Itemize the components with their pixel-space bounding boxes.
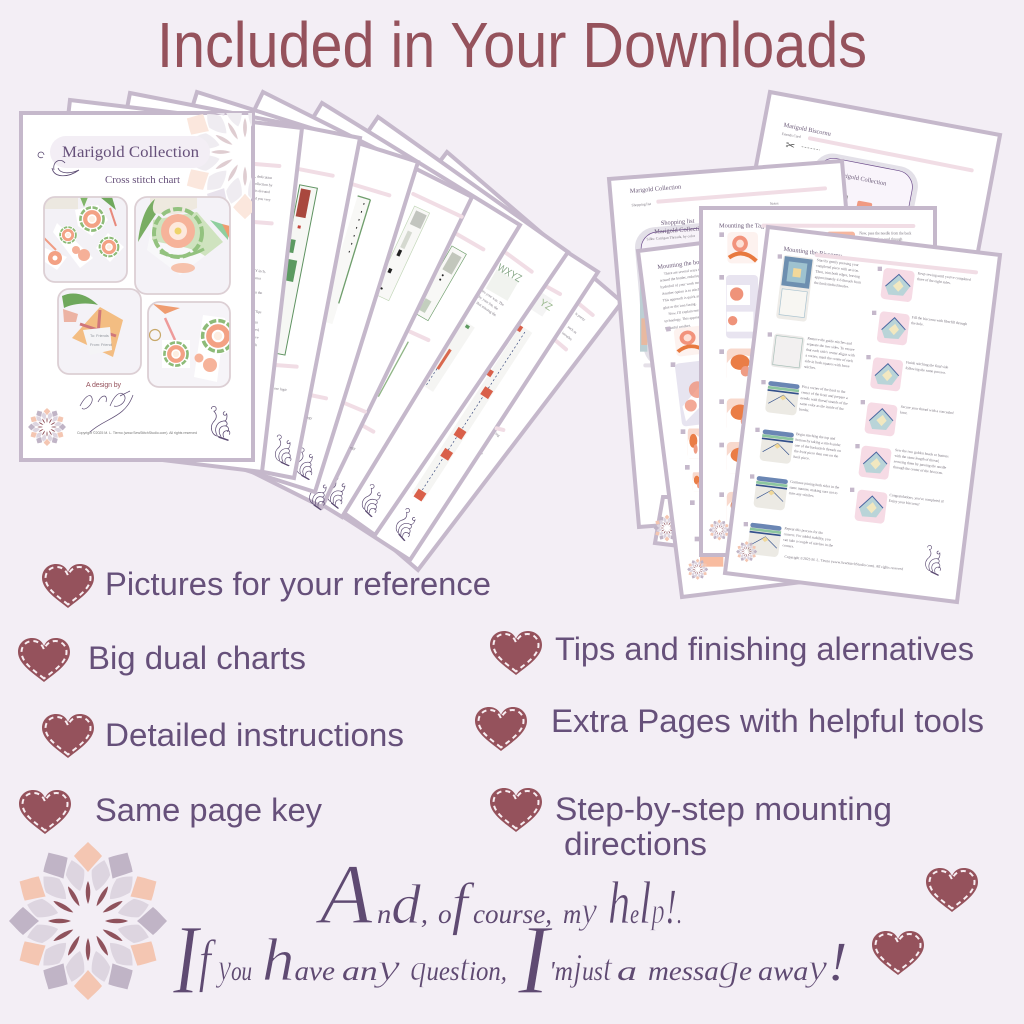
feature: mounting directions: directions (564, 826, 707, 862)
copyright: Copyright ©2025 M. L. Tierno (www.SewStitchStudio.com). All rights reserved (784, 554, 904, 571)
shopping list page: Marigold Collection (630, 183, 682, 195)
cover page (19, 111, 255, 462)
mounting the tag page: Mounting the Tag (719, 223, 765, 230)
shopping list page: Silks: Carrigan Threads, by color (646, 234, 696, 242)
line one: nd, (377, 874, 428, 936)
finishing card page: Marigold Biscornu (783, 122, 832, 138)
shopping list page: Notes (770, 201, 779, 206)
line two: any (342, 947, 400, 989)
line one: my (563, 890, 597, 932)
left steps: the front piece then one on the (794, 449, 839, 458)
page 2: ose logic (274, 386, 288, 392)
mounting the bookmark page: Mounting the bookmark (657, 256, 720, 271)
left steps: corners. (782, 543, 794, 549)
page 1: d you very (255, 196, 271, 202)
left steps: Begin stitching the top and (796, 432, 836, 441)
feature: mounting directions (490, 788, 892, 862)
line two: message (648, 947, 752, 989)
photo 4: pillow and bookmark (148, 302, 236, 387)
line two: you (215, 947, 252, 989)
feature: instructions: Detailed instructions (105, 717, 404, 753)
left steps: needle with thread strands of the (800, 396, 848, 406)
page 1: ross (255, 276, 262, 281)
page 1: in (255, 320, 258, 325)
line two: I (517, 904, 554, 1015)
feature: charts: Big dual charts (88, 640, 306, 676)
decorative heart upper (926, 868, 978, 912)
page 1: h (255, 343, 257, 347)
photo 2: biscornu (135, 197, 230, 294)
designer credit: A design by (86, 382, 122, 389)
page 1: ve (255, 335, 259, 340)
mounting the tag page: of the mounting cord through (859, 237, 903, 241)
right steps: through the center of the biscornu. (893, 465, 943, 475)
feature: pictures: Pictures for your reference (105, 566, 491, 602)
right steps (850, 267, 971, 524)
mounting the bookmark page (638, 222, 914, 597)
cover curl ornament (38, 152, 79, 176)
mounting the bookmark page: glue or the iron fusing. (663, 302, 697, 310)
photo 3: gift box: From: Friend (90, 343, 112, 347)
right steps: Congratulations, you've completed it! (889, 493, 944, 505)
right steps: Finish stitching the final side (906, 360, 949, 370)
cover curl (211, 406, 230, 440)
mounting the bookmark page: Another option is to stitch it, (662, 287, 704, 297)
page 8: intrudes (561, 331, 573, 342)
right steps: the hole. (911, 321, 924, 327)
page 6: WXYZ (495, 262, 524, 285)
right steps: securing them by passing the needle (894, 459, 947, 470)
shopping list page: Marigold Collection (654, 225, 707, 236)
page 4 (113, 92, 472, 510)
cover subtitle: Cross stitch chart (105, 175, 180, 186)
mounting the bookmark page: technology. This approach (664, 315, 703, 323)
left steps: border. (799, 407, 810, 413)
line one: help!. (608, 870, 682, 936)
left steps: side in both squares with loose (805, 359, 850, 369)
left steps: separate the two sides. To ensure (807, 342, 855, 352)
hidden page corner (649, 497, 720, 551)
mounting the biscornu page (725, 227, 1000, 602)
left steps: that each side's center aligns with (806, 348, 855, 358)
right steps: knot. (900, 410, 908, 415)
line one: A (315, 846, 373, 942)
page 6 (185, 117, 568, 535)
fan of chart pages (21, 62, 622, 570)
right steps: Enjoy your biscornu! (889, 499, 920, 506)
right steps: Sew the two golden beads or buttons (895, 448, 949, 459)
feature: tips (490, 631, 974, 675)
page 6: ibut missing the (475, 301, 497, 317)
left steps: stitches. (804, 365, 816, 370)
feature: extra pages: Extra Pages with helpful tools (551, 703, 984, 739)
right steps: following the same process. (905, 366, 946, 375)
line two: have (262, 927, 335, 993)
mounting the bookmark page: hydrofoil of your work mounted (660, 280, 708, 289)
left steps: approximately 4-6 threads from (815, 275, 861, 285)
decorative heart lower (872, 931, 924, 975)
feature: charts (18, 638, 306, 682)
left steps: corners. For added stability, you (783, 532, 831, 543)
mandala (733, 538, 761, 566)
page 2: ogy (306, 415, 313, 420)
right steps: Keep sewing until you've completed (918, 271, 971, 282)
signature (80, 391, 133, 432)
line one: course, (473, 899, 552, 929)
mounting the bookmark page: beautiful product. (665, 324, 691, 331)
left steps: miss any stitches. (789, 491, 815, 498)
feature: mounting directions: Step-by-step mounting (555, 791, 892, 827)
left steps: bottom by taking a stitch under (795, 438, 842, 447)
shopping list page (609, 161, 872, 527)
mounting the bookmark page: There are several ways to finish (664, 266, 711, 276)
feature: tips: Tips and finishing alernatives (555, 631, 974, 667)
left steps: Start by gently pressing your (817, 258, 860, 267)
curl (924, 545, 943, 575)
left steps (744, 254, 861, 557)
left steps: back piece. (793, 455, 810, 461)
right steps: three of the eight sides. (917, 277, 951, 285)
left steps: Remove the guide stitches and (807, 336, 852, 346)
photo 1: collection (44, 197, 127, 282)
cover title pill (50, 136, 210, 168)
left steps: same manner, making sure not to (789, 485, 838, 496)
page 6: it's your way. The (481, 289, 505, 307)
page 1: Tips (255, 310, 262, 314)
photo 3: gift box: To: Friends (90, 334, 109, 338)
right steps: Fill the biscornu with fiberfill through (912, 315, 968, 326)
left steps: can take a couple of stitches in the (783, 538, 834, 548)
left steps: Then, trim both edges, leaving (815, 269, 860, 280)
line one (315, 846, 682, 942)
mounting the bookmark page: around the border, reducing bulk (660, 273, 708, 284)
line two: f (199, 928, 216, 993)
page 3: ogy (350, 445, 356, 451)
shopping list page: Shopping list (661, 218, 695, 227)
page 1: ed, (255, 328, 260, 333)
page 2 (64, 93, 360, 478)
mounting the bookmark page: Now, I'll explain one (668, 308, 700, 317)
page 1: ollection by (255, 182, 273, 187)
mounting the tag page: Now, pass the needle from the back (859, 231, 912, 236)
feature: key (19, 790, 322, 834)
page 1: Y inch, (255, 269, 266, 275)
line two: a (617, 956, 637, 986)
mounting the tag page (701, 208, 935, 555)
line two: I (172, 904, 202, 1015)
feature: instructions (42, 714, 404, 758)
finishing card page: ✂ (784, 139, 796, 153)
page 1: n the (255, 290, 263, 295)
mounting the bookmark page: This approach is quick and (662, 294, 702, 303)
photo 3: gift box (58, 289, 141, 374)
pale mandala watermark (187, 113, 252, 219)
right steps: with the same length of thread, (894, 454, 940, 464)
left steps: Repeat this process for the (784, 526, 824, 535)
page 6: by your list, the (477, 295, 499, 312)
shopping list page: Shopping list (631, 202, 651, 207)
page 8 (243, 152, 622, 570)
page 3 (94, 92, 418, 492)
left steps: one of the backstitch threads on (795, 443, 841, 453)
page 5 (144, 103, 520, 517)
right page cluster (609, 92, 1000, 602)
feature: pictures (42, 564, 491, 608)
page 7: YZ (537, 297, 554, 314)
left steps: completed piece with an iron. (816, 264, 859, 273)
feature: key: Same page key (95, 792, 322, 828)
left steps: center of the front and prepare a (801, 390, 848, 400)
feature list (18, 564, 984, 862)
cover title pill: Marigold Collection (62, 144, 199, 161)
copyright: Copyright ©2025 M. L. Tierno (www.SewStitchStudio.com). All rights reserved (77, 431, 197, 435)
title: Included in Your Downloads (157, 9, 867, 81)
page 1: is devoted (255, 189, 270, 194)
page 8: such as (567, 325, 578, 335)
left steps: the backstitched border. (814, 281, 849, 289)
page 8: ing (494, 432, 501, 438)
large mandala (0, 815, 193, 1024)
finishing card page: Friends Card (782, 132, 801, 139)
small mandala (22, 402, 72, 452)
finishing card page (705, 92, 1000, 479)
closing message (172, 846, 848, 1015)
heading: Mounting the Biscornu (783, 246, 843, 260)
line two: just (569, 947, 613, 989)
finishing card page: Marigold Collection (835, 171, 888, 188)
page 1: , dedication (255, 174, 272, 181)
line two (172, 904, 848, 1015)
left steps: Pin a corner of the back to the (802, 385, 846, 394)
page 8: te (479, 451, 484, 456)
line two: 'm (549, 956, 573, 986)
page 8: is pretty (574, 312, 586, 322)
left steps: Continue joining both sides in the (790, 480, 840, 490)
page 7 (214, 145, 598, 560)
left steps: a corner, mark the center of each (805, 353, 853, 364)
line two: question, (410, 947, 507, 989)
feature: extra pages (475, 703, 984, 751)
right steps: Secure your thread with a concealed (901, 405, 954, 415)
line two: away! (758, 931, 848, 993)
page 1 (30, 100, 302, 472)
line one: of (438, 871, 475, 936)
left steps: same color as the inside of the (800, 402, 844, 411)
